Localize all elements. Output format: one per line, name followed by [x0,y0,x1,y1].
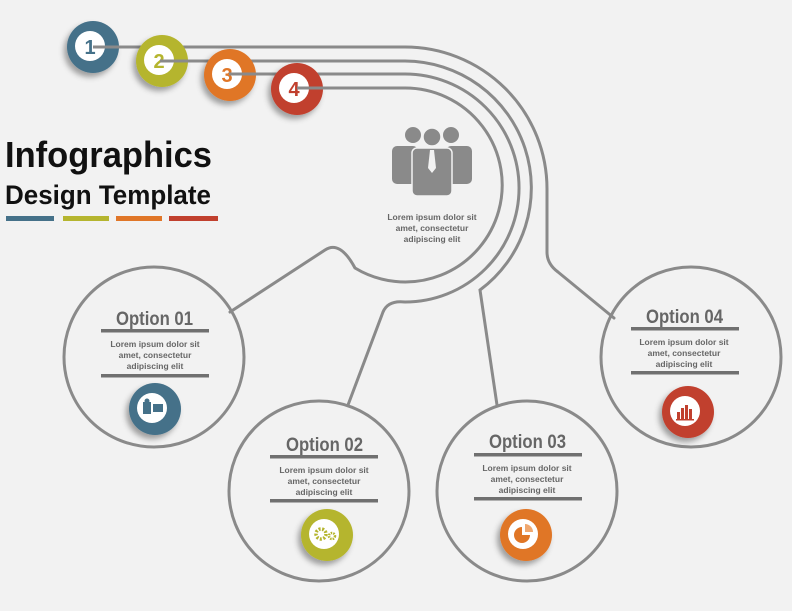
badge 1: 1 [84,37,96,59]
panel: option 03: adipiscing elit [499,485,556,495]
icon: pie chart [500,509,552,561]
badge 2 [136,35,188,87]
panel: option 03: Option 03 [489,432,566,453]
badge 3 [204,49,256,101]
panel: option 01: Option 01 [116,309,193,330]
number badges [67,21,323,115]
lines over badges [93,47,330,88]
panel: option 02 [270,435,378,561]
panel: option 04: Option 04 [646,307,723,328]
central text: Lorem ipsum dolor sit [387,212,477,222]
panel: option 01: Lorem ipsum dolor sit [110,339,200,349]
central text: adipiscing elit [404,234,461,244]
panel: option 02: amet, consectetur [288,476,361,486]
title: Infographics [5,134,212,175]
badge 4 [271,63,323,115]
panel: option 02: Lorem ipsum dolor sit [279,465,369,475]
icon: people [392,127,472,196]
title [5,134,212,210]
panel: option 03: amet, consectetur [491,474,564,484]
panel: option 03 [474,432,582,561]
panel: option 04: Lorem ipsum dolor sit [639,337,729,347]
panel: option 02: Option 02 [286,435,363,456]
panel: option 03: Lorem ipsum dolor sit [482,463,572,473]
panel: option 01: adipiscing elit [127,361,184,371]
panel: option 04 [631,307,739,438]
panel: option 04: adipiscing elit [656,359,713,369]
icon: bar chart [662,386,714,438]
central text [387,212,477,244]
connector lines [93,47,614,405]
panel: option 02: adipiscing elit [296,487,353,497]
icon: puzzle [129,383,181,435]
title: Design Template [5,180,211,210]
icon: gears [301,509,353,561]
option circles outlines [64,267,781,581]
color bars [6,216,218,221]
badge 1 [67,21,119,73]
panel: option 01 [101,309,209,435]
panel: option 01: amet, consectetur [119,350,192,360]
panel: option 04: amet, consectetur [648,348,721,358]
badge 2: 2 [153,51,165,73]
badge 4: 4 [288,79,300,101]
badge 3: 3 [221,65,233,87]
central text: amet, consectetur [396,223,469,233]
